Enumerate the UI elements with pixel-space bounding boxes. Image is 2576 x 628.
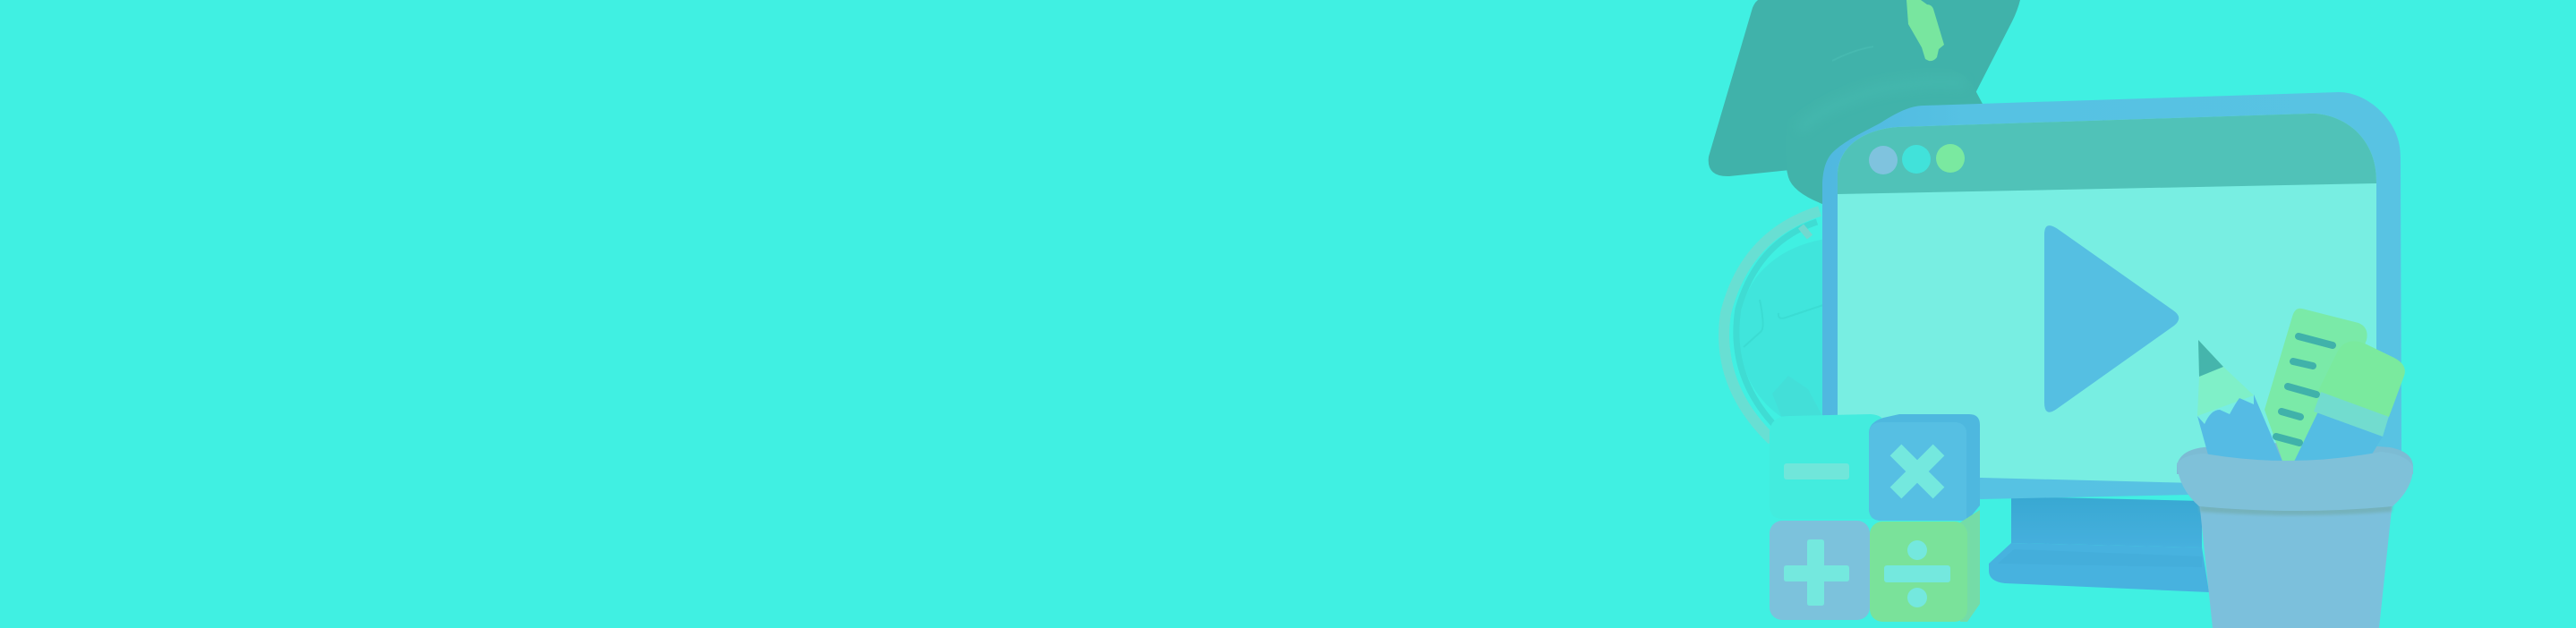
icon: pencil (2197, 340, 2282, 462)
multiply block (1869, 414, 1980, 521)
icon: cap tassel (1906, 0, 1944, 61)
monitor stand (1989, 496, 2209, 592)
cup rim back (2177, 443, 2413, 474)
cup rim front (2177, 452, 2413, 511)
icon: play button (2044, 225, 2179, 412)
icon: ruler (2265, 309, 2367, 461)
icon: pencil cup (2177, 309, 2413, 628)
icon: globe (1724, 211, 1826, 440)
icon: eraser (2294, 341, 2405, 462)
window dots (1869, 144, 1965, 174)
icon: graduation cap (1709, 0, 2020, 204)
screen (1838, 114, 2376, 488)
divide block (1870, 510, 1980, 622)
monitor frame (1822, 92, 2401, 499)
plus block (1770, 521, 1870, 620)
icon: math blocks (1770, 414, 1980, 622)
cup body (2199, 501, 2393, 628)
minus block (1770, 414, 1883, 519)
window title bar (1838, 114, 2376, 194)
icon: monitor (1822, 92, 2401, 592)
